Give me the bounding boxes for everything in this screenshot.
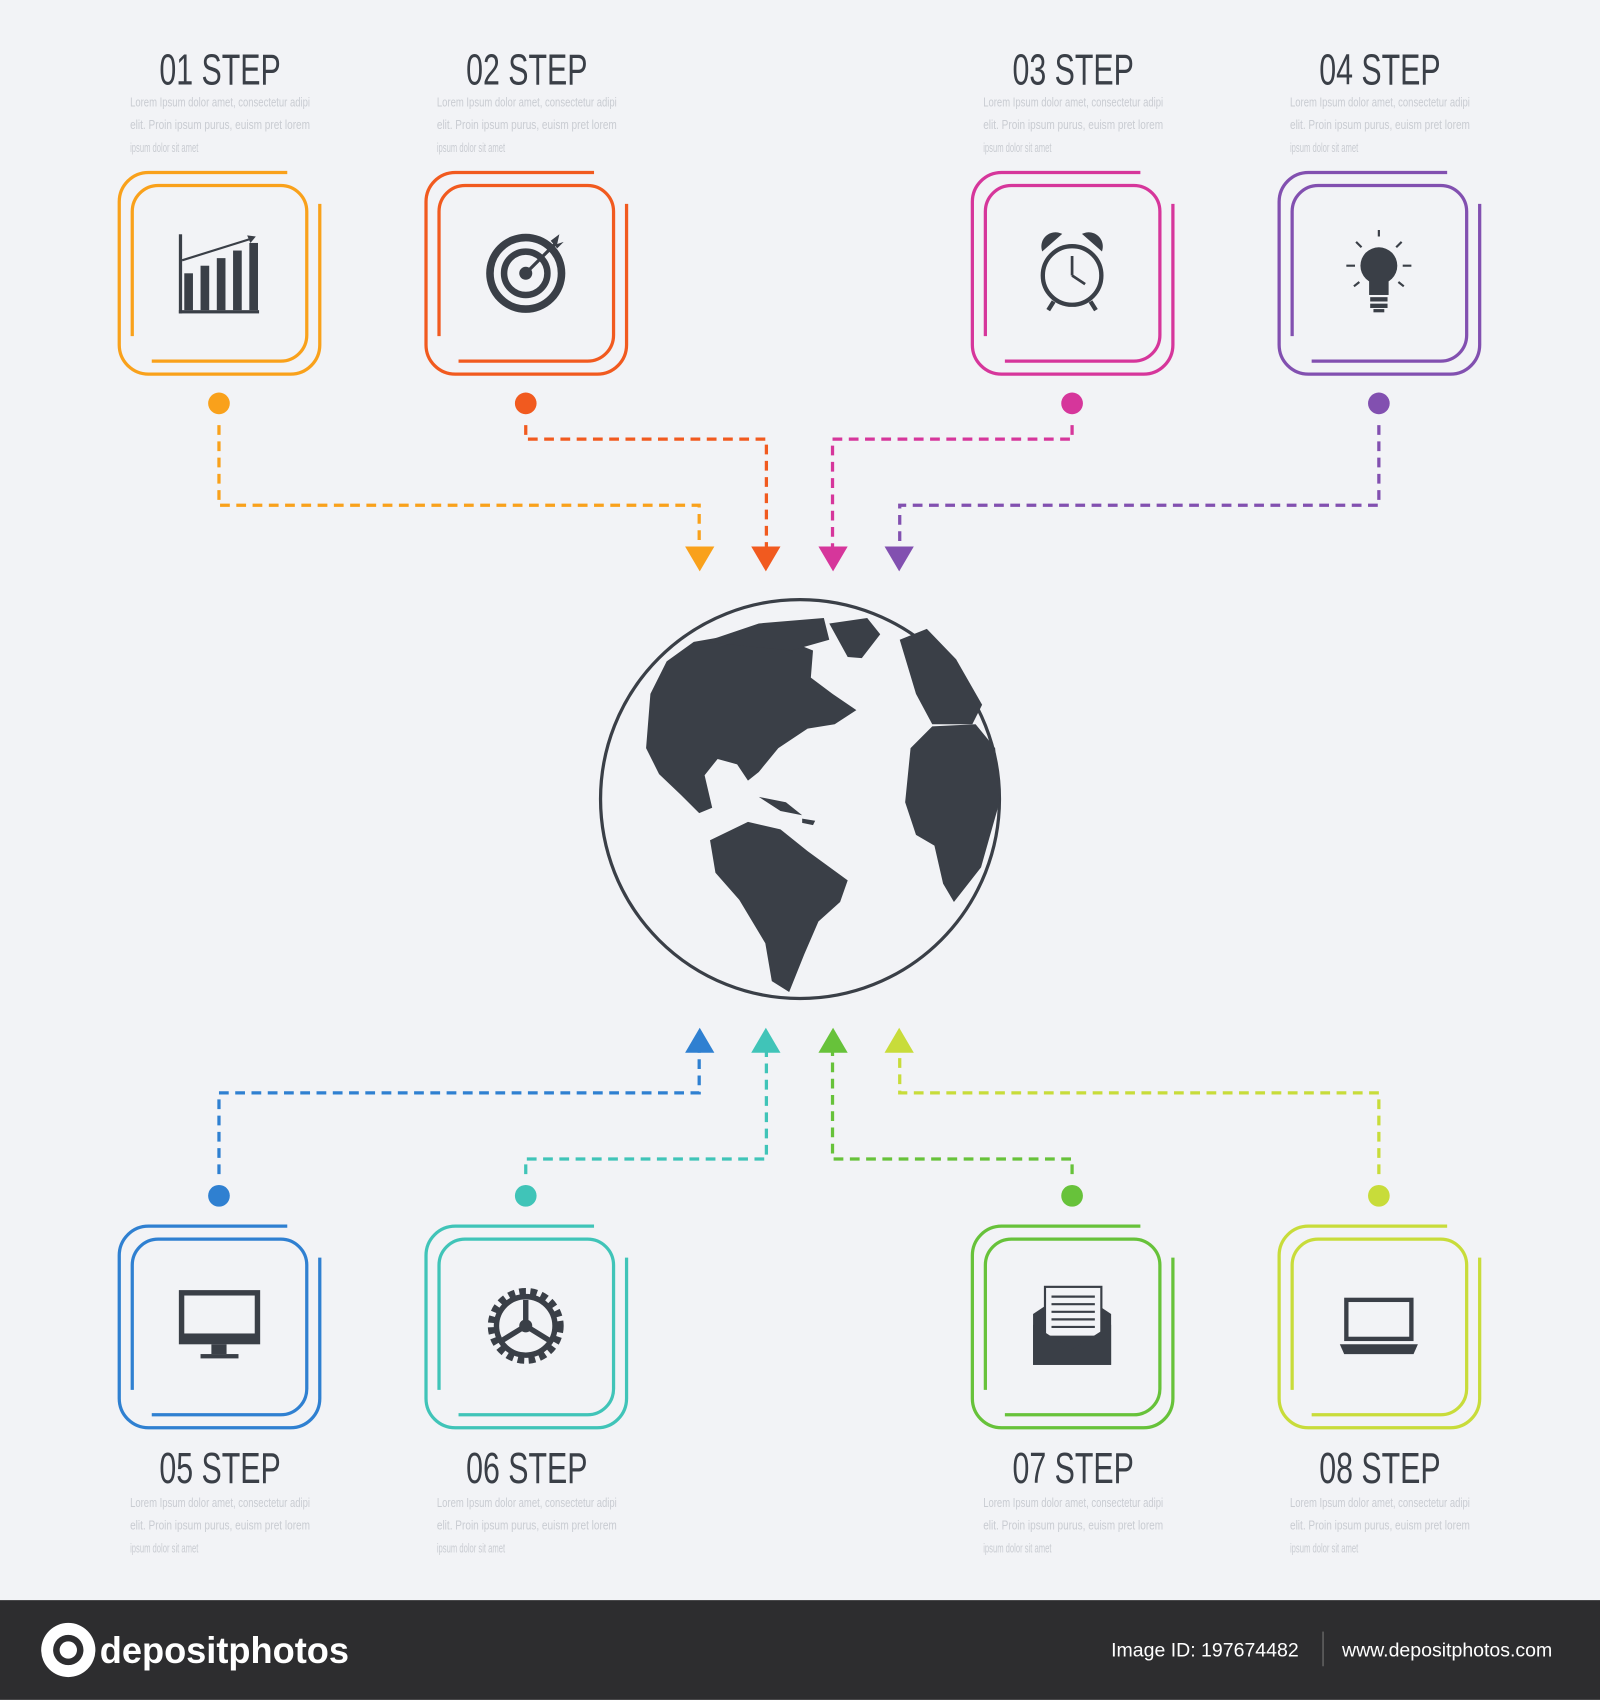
box 06 xyxy=(426,1226,627,1428)
text block 04 xyxy=(1290,95,1470,155)
brand name: depositphotos xyxy=(100,1630,349,1671)
icon: target xyxy=(490,234,564,309)
step 07 xyxy=(972,1226,1173,1555)
step 02 xyxy=(426,47,627,374)
box 07 xyxy=(972,1226,1173,1428)
icon: bar chart xyxy=(179,234,259,313)
title: 01 STEP: 01 STEP xyxy=(159,47,281,95)
box 01 xyxy=(119,172,320,374)
text block 08 xyxy=(1290,1496,1470,1555)
icon: monitor xyxy=(179,1290,260,1358)
title: 08 STEP: 08 STEP xyxy=(1319,1445,1441,1493)
connectors: top xyxy=(208,393,1390,571)
text block 01 xyxy=(130,95,310,155)
box 03 xyxy=(972,172,1173,374)
text block 07 xyxy=(983,1496,1163,1555)
title: 06 STEP: 06 STEP xyxy=(466,1445,588,1493)
connectors: bottom xyxy=(208,1028,1390,1207)
footer xyxy=(0,1600,1600,1700)
title: 07 STEP: 07 STEP xyxy=(1012,1445,1134,1493)
image id: Image ID: 197674482 xyxy=(1111,1640,1299,1662)
icon: alarm clock xyxy=(1042,233,1102,310)
text block 02 xyxy=(437,95,617,155)
icon: laptop xyxy=(1340,1298,1418,1354)
box 04 xyxy=(1279,172,1480,374)
icon: logo xyxy=(41,1623,95,1677)
title: 04 STEP: 04 STEP xyxy=(1319,47,1441,95)
step 06 xyxy=(426,1226,627,1555)
step 08 xyxy=(1279,1226,1480,1555)
text block 06 xyxy=(437,1496,617,1555)
title: 03 STEP: 03 STEP xyxy=(1012,47,1134,95)
step 03 xyxy=(972,47,1173,374)
step 01 xyxy=(119,47,320,374)
icon: light bulb xyxy=(1346,230,1411,312)
box 05 xyxy=(119,1226,320,1428)
url: www.depositphotos.com xyxy=(1341,1640,1552,1662)
icon: envelope xyxy=(1033,1287,1111,1365)
globe xyxy=(601,600,999,999)
title: 05 STEP: 05 STEP xyxy=(159,1445,281,1493)
box 08 xyxy=(1279,1226,1480,1428)
step 04 xyxy=(1279,47,1480,374)
text block 03 xyxy=(983,95,1163,155)
title: 02 STEP: 02 STEP xyxy=(466,47,588,95)
box 02 xyxy=(426,172,627,374)
step 05 xyxy=(119,1226,320,1555)
icon: gear xyxy=(492,1292,559,1359)
text block 05 xyxy=(130,1496,310,1555)
